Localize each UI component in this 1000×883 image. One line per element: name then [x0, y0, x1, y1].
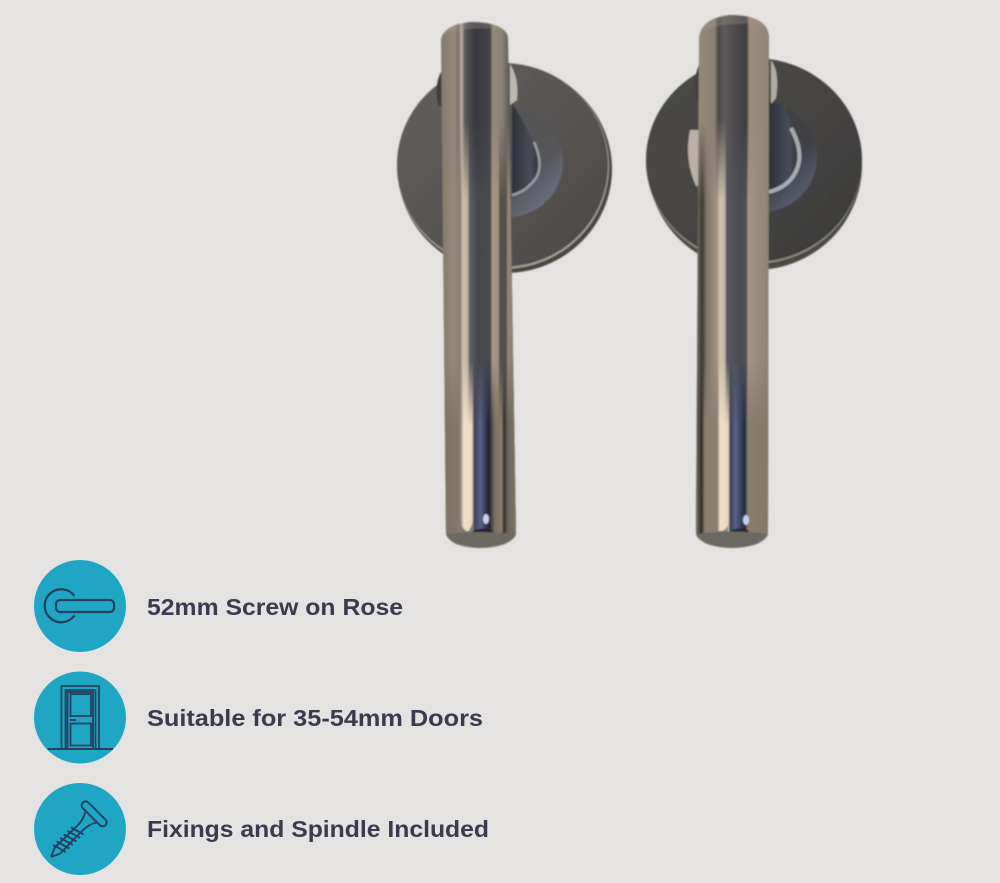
right rose plate	[646, 58, 862, 270]
feature: fixings and spindle	[34, 783, 489, 875]
icon: door handle	[34, 560, 126, 652]
label: fixings and spindle included: Fixings and Spindle Included	[147, 816, 489, 842]
right door handle	[646, 10, 862, 555]
icon: screw	[34, 783, 126, 875]
label: 52mm screw on rose: 52mm Screw on Rose	[147, 594, 403, 620]
left rose plate	[397, 63, 612, 273]
right lever end cap	[696, 532, 768, 548]
label: suitable for 35-54mm doors: Suitable for 35-54mm Doors	[147, 705, 483, 731]
right lever bar	[695, 14, 770, 535]
icon: door	[34, 672, 126, 764]
left door handle	[397, 15, 612, 555]
feature: suitable door thickness	[34, 672, 483, 764]
left lever end cap	[446, 532, 516, 548]
left lever bar	[440, 21, 517, 535]
feature: 52mm screw on rose	[34, 560, 403, 652]
